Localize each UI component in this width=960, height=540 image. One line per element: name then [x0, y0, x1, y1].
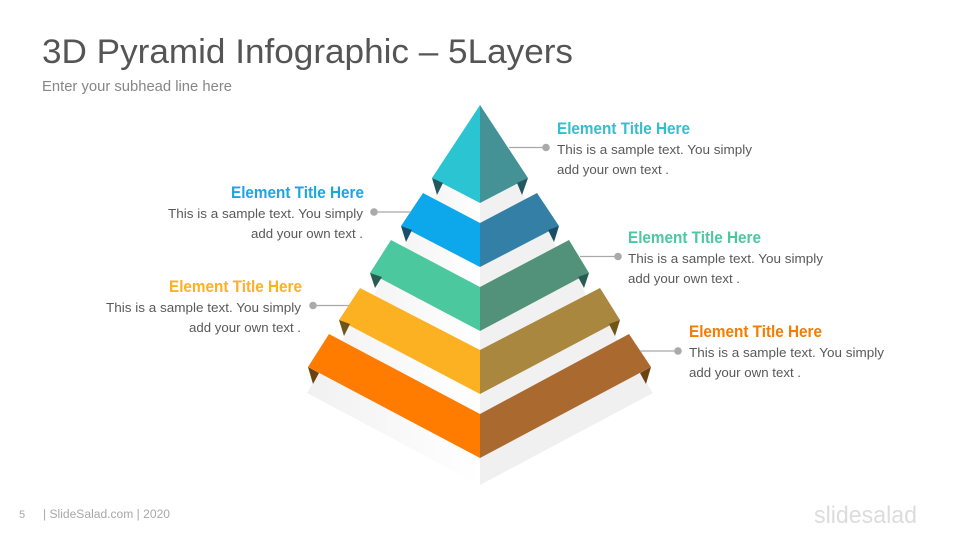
text block 1: Element Title Here — [557, 120, 690, 138]
connector 1 — [509, 144, 550, 151]
footer text: | SlideSalad.com | 2020 — [43, 509, 170, 521]
text block 4 — [106, 278, 302, 335]
gap band under layer 2 — [400, 230, 560, 300]
pyramid — [307, 105, 653, 485]
text block 2: add your own text . — [251, 226, 363, 241]
text block 2: This is a sample text. You simply — [168, 206, 363, 221]
text block 5: add your own text . — [689, 365, 801, 380]
layer 4 yellow — [339, 288, 620, 394]
text block 4: This is a sample text. You simply — [106, 300, 301, 315]
text block 1: add your own text . — [557, 162, 669, 177]
text block 4: add your own text . — [189, 320, 301, 335]
text block 3 — [628, 229, 823, 286]
text block 4: Element Title Here — [169, 278, 302, 296]
text block 3: Element Title Here — [628, 229, 761, 247]
base shadow — [307, 373, 653, 485]
gap band under layer 4 — [340, 324, 620, 430]
layer 2 blue — [401, 193, 559, 267]
logo wordmark: slidesalad — [814, 502, 917, 529]
layer 1 teal — [432, 105, 528, 203]
text block 1: This is a sample text. You simply — [557, 142, 752, 157]
connector 2 — [370, 208, 411, 216]
subhead: Enter your subhead line here — [42, 78, 232, 95]
connector 3 — [580, 253, 622, 260]
text block 2: Element Title Here — [231, 184, 364, 202]
layer 5 orange — [308, 334, 651, 458]
connector 5 — [640, 347, 682, 355]
layer 3 green — [370, 240, 589, 331]
title: 3D Pyramid Infographic – 5Layers — [42, 33, 573, 71]
text block 5 — [689, 323, 884, 380]
text block 3: add your own text . — [628, 271, 740, 286]
text block 5: This is a sample text. You simply — [689, 345, 884, 360]
connector 4 — [309, 302, 349, 309]
gap band under layer 3 — [370, 277, 590, 365]
text block 2 — [168, 184, 364, 241]
text block 3: This is a sample text. You simply — [628, 251, 823, 266]
page number: 5 — [19, 509, 25, 521]
text block 1 — [557, 120, 752, 177]
gap band under layer 1 — [430, 183, 530, 235]
text block 5: Element Title Here — [689, 323, 822, 341]
